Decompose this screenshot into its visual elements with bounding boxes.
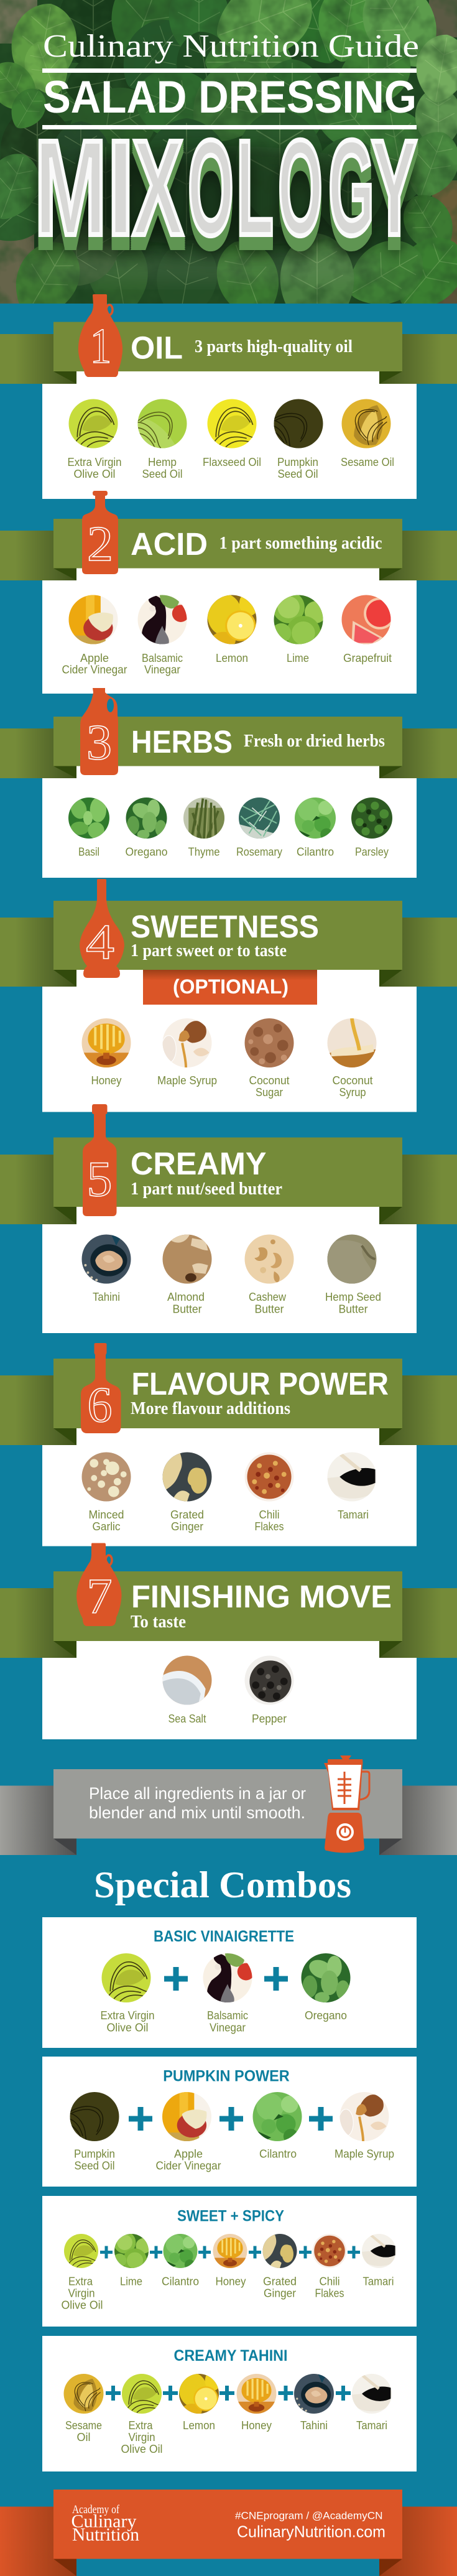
ingredient: sesame oil: Sesame Oil xyxy=(341,455,394,468)
ingredient: minced garlic: Garlic xyxy=(92,1520,121,1533)
combo heading: PUMPKIN POWER xyxy=(163,2068,290,2085)
ingredient: extra virgin olive oil: Olive Oil xyxy=(73,467,116,480)
ingredient: coconut syrup: Coconut xyxy=(332,1074,373,1087)
header rule xyxy=(42,68,417,73)
heading: herbs: HERBS xyxy=(131,724,233,760)
panel: combo pumpkin power xyxy=(42,2057,417,2187)
subheading: More flavour additions xyxy=(131,1399,290,1418)
icon: bottle 7: 7 xyxy=(87,1569,112,1624)
ingredient: pumpkin seed oil xyxy=(265,399,323,480)
ingredient: hemp seed oil: Seed Oil xyxy=(142,467,183,480)
ingredient: pepper xyxy=(245,1656,293,1725)
ingredient: cilantro xyxy=(162,2234,199,2288)
panel: step 5 creamy xyxy=(0,1104,457,1333)
ingredient: flaxseed oil: Flaxseed Oil xyxy=(203,455,261,468)
ingredient: balsamic vinegar: Balsamic xyxy=(142,651,183,664)
ingredient: basil xyxy=(68,796,109,858)
ingredient: tamari: Tamari xyxy=(363,2274,394,2288)
icon: bottle 4 xyxy=(80,879,124,978)
plus sign xyxy=(129,2107,152,2131)
ingredient: lemon: Lemon xyxy=(183,2419,215,2432)
ingredient: honey xyxy=(213,2234,247,2288)
footer ribbon xyxy=(0,2490,457,2576)
ingredient: thyme: Thyme xyxy=(188,845,220,858)
ingredient: maple syrup: Maple Syrup xyxy=(335,2147,394,2160)
icon: bottle 2: 2 xyxy=(87,517,113,572)
heading: sweetness: SWEETNESS xyxy=(131,909,319,944)
plus sign xyxy=(164,1967,188,1991)
header rule xyxy=(42,125,417,129)
plus sign xyxy=(219,2107,243,2131)
panel: combo creamy tahini xyxy=(42,2336,417,2471)
panel: step 6 flavour power xyxy=(0,1343,457,1546)
ingredient: extra virgin olive oil: Virgin xyxy=(128,2430,155,2443)
plus sign xyxy=(309,2107,333,2131)
logo: Academy of Culinary Nutrition: Nutrition xyxy=(72,2524,139,2545)
callout: optional: (OPTIONAL) xyxy=(173,975,289,998)
plus sign xyxy=(249,2246,261,2258)
ingredient: almond butter: Butter xyxy=(173,1303,201,1315)
header photo: salad greens xyxy=(0,0,457,333)
combo heading: CREAMY TAHINI xyxy=(174,2347,287,2364)
ingredient: lime xyxy=(272,592,326,664)
icon: bottle 1 xyxy=(78,294,122,377)
ingredient: coconut syrup xyxy=(327,1018,377,1099)
ingredient: extra virgin olive oil: Extra xyxy=(128,2419,153,2432)
ingredient: extra virgin olive oil: Olive Oil xyxy=(61,2298,103,2312)
icon: bottle 3 xyxy=(80,688,118,775)
footer website: CulinaryNutrition.com xyxy=(237,2522,385,2541)
header title: Mixology 3D lettering: X xyxy=(132,113,183,264)
subheading: 1 part something acidic xyxy=(219,534,382,553)
ingredient: cashew butter: Butter xyxy=(255,1303,284,1315)
ingredient: sea salt xyxy=(163,1656,211,1725)
ingredient: sesame oil: Oil xyxy=(77,2430,91,2443)
ingredient: grated ginger: Ginger xyxy=(264,2287,296,2299)
ingredient: balsamic vinegar xyxy=(138,595,189,676)
ingredient: oregano xyxy=(126,797,168,858)
ingredient: almond butter xyxy=(163,1234,211,1315)
ingredient: balsamic vinegar: Vinegar xyxy=(210,2020,246,2034)
ingredient: sesame oil: Sesame xyxy=(65,2419,102,2432)
instruction text xyxy=(89,1784,306,1822)
ingredient: grated ginger xyxy=(262,2234,297,2299)
subheading: 1 part sweet or to taste xyxy=(131,941,287,960)
ingredient: extra virgin olive oil: Extra Virgin xyxy=(101,2009,154,2022)
ingredient: grated ginger: Ginger xyxy=(171,1520,203,1533)
ingredient: cashew butter: Cashew xyxy=(249,1290,287,1303)
ingredient: balsamic vinegar: Balsamic xyxy=(207,2009,248,2022)
ingredient: tahini: Tahini xyxy=(93,1290,120,1303)
ingredient: pumpkin seed oil: Pumpkin xyxy=(74,2147,115,2160)
combo heading: SWEET + SPICY xyxy=(177,2207,284,2225)
ingredient: coconut syrup: Syrup xyxy=(339,1086,366,1099)
ingredient: oregano: Oregano xyxy=(126,845,168,858)
heading: special combos: Special Combos xyxy=(94,1864,351,1905)
heading: finishing move: FINISHING MOVE xyxy=(131,1579,392,1614)
subheading: 3 parts high-quality oil xyxy=(195,337,353,356)
ingredient: hemp seed butter xyxy=(325,1234,381,1315)
plus sign xyxy=(299,2246,312,2258)
ingredient: grated ginger: Grated xyxy=(263,2274,297,2288)
ingredient: extra virgin olive oil: Olive Oil xyxy=(107,2020,148,2034)
ingredient: almond butter: Almond xyxy=(167,1290,205,1303)
header title: Mixology 3D lettering: G xyxy=(328,113,374,264)
ingredient: lemon xyxy=(208,592,259,664)
ingredient: balsamic vinegar xyxy=(203,1953,254,2034)
footer hashtag and handle: #CNEprogram / @AcademyCN xyxy=(235,2509,383,2522)
ingredient: tamari xyxy=(327,1452,377,1521)
header title: Mixology 3D lettering: L xyxy=(236,113,274,264)
plus sign xyxy=(150,2246,162,2258)
ingredient: maple syrup: Maple Syrup xyxy=(157,1074,217,1087)
ingredient: grated ginger xyxy=(163,1452,211,1533)
ingredient: pepper: Pepper xyxy=(252,1712,287,1725)
heading: acid: ACID xyxy=(131,526,208,562)
icon: bottle 1: 1 xyxy=(90,319,112,374)
panel: step 4 sweetness xyxy=(0,879,457,1112)
ingredient: coconut sugar xyxy=(245,1018,293,1099)
ingredient: honey: Honey xyxy=(91,1074,122,1087)
ingredient: apple cider vinegar: Apple xyxy=(174,2147,203,2160)
ingredient: honey: Honey xyxy=(241,2419,272,2432)
ingredient: coconut sugar: Sugar xyxy=(256,1086,283,1099)
ingredient: parsley xyxy=(351,797,392,858)
ingredient: honey xyxy=(236,2374,276,2432)
heading: flavour power: FLAVOUR POWER xyxy=(132,1366,389,1402)
ingredient: sea salt: Sea Salt xyxy=(168,1712,206,1725)
plus sign xyxy=(106,2386,121,2401)
ingredient: apple cider vinegar: Cider Vinegar xyxy=(155,2159,221,2172)
ingredient: oregano xyxy=(301,1953,351,2022)
ingredient: pumpkin seed oil: Seed Oil xyxy=(75,2159,114,2172)
ingredient: cilantro: Cilantro xyxy=(162,2274,199,2288)
ingredient: cilantro xyxy=(295,797,336,858)
header title: Culinary Nutrition Guide: Culinary Nutrition Guide xyxy=(43,29,419,64)
ingredient: lime xyxy=(113,2231,151,2288)
ingredient: grated ginger: Grated xyxy=(170,1508,204,1521)
instruction text: blender and mix until smooth. xyxy=(89,1803,305,1822)
ingredient: chili flakes xyxy=(245,1452,293,1533)
icon: bottle 3: 3 xyxy=(86,715,112,770)
ingredient: chili flakes xyxy=(312,2234,347,2299)
ingredient: hemp seed butter: Butter xyxy=(338,1303,368,1315)
logo: Academy of Culinary Nutrition: Academy of xyxy=(72,2503,120,2516)
ingredient: tamari: Tamari xyxy=(338,1508,369,1521)
ingredient: chili flakes: Chili xyxy=(259,1508,280,1521)
ingredient: apple cider vinegar xyxy=(155,2092,221,2172)
ingredient: pumpkin seed oil: Pumpkin xyxy=(277,455,318,468)
header title: Mixology 3D lettering: I xyxy=(107,113,134,264)
ingredient: tahini xyxy=(82,1234,131,1303)
instruction text: Place all ingredients in a jar or xyxy=(89,1784,306,1803)
icon: blender xyxy=(324,1755,369,1853)
ingredient: extra virgin olive oil: Extra xyxy=(68,2274,93,2288)
ingredient: hemp seed oil: Hemp xyxy=(148,455,177,468)
ingredient: apple cider vinegar: Apple xyxy=(80,651,109,664)
ingredient: extra virgin olive oil xyxy=(121,2374,163,2455)
subheading: Fresh or dried herbs xyxy=(244,732,385,751)
ingredient: lemon: Lemon xyxy=(216,651,248,664)
header title: Salad Dressing: SALAD DRESSING xyxy=(43,72,417,123)
ingredient: balsamic vinegar: Vinegar xyxy=(144,663,180,676)
ingredient: honey xyxy=(82,1018,131,1087)
panel: combo basic vinaigrette xyxy=(42,1917,417,2048)
panel: step 3 herbs xyxy=(0,688,457,878)
plus sign xyxy=(336,2386,351,2401)
ingredient: grapefruit xyxy=(342,595,395,664)
plus sign xyxy=(163,2386,178,2401)
ingredient: sesame oil xyxy=(63,2374,105,2443)
ingredient: extra virgin olive oil xyxy=(101,1953,154,2034)
ingredient: maple syrup xyxy=(157,1018,217,1087)
ingredient: lime: Lime xyxy=(120,2274,142,2288)
icon: bottle 7 xyxy=(76,1543,122,1626)
ingredient: coconut sugar: Coconut xyxy=(249,1074,290,1087)
plus sign xyxy=(348,2246,360,2258)
heading: oil: OIL xyxy=(131,330,183,366)
callout: optional xyxy=(143,970,317,1005)
ingredient: extra virgin olive oil xyxy=(61,2234,103,2312)
ingredient: basil: Basil xyxy=(78,845,99,858)
ingredient: chili flakes: Chili xyxy=(320,2274,339,2288)
icon: bottle 5: 5 xyxy=(87,1152,112,1207)
icon: bottle 2 xyxy=(82,491,118,574)
ingredient: tahini: Tahini xyxy=(300,2419,328,2432)
ingredient: sesame oil xyxy=(341,399,394,468)
ingredient: extra virgin olive oil: Olive Oil xyxy=(121,2442,163,2455)
subheading: 1 part nut/seed butter xyxy=(131,1179,282,1199)
ingredient: apple cider vinegar: Cider Vinegar xyxy=(62,663,127,676)
ingredient: pumpkin seed oil xyxy=(61,2092,119,2172)
ingredient: tamari xyxy=(362,2234,396,2288)
ingredient: lemon xyxy=(179,2371,221,2432)
plus sign xyxy=(279,2386,293,2401)
ingredient: maple syrup xyxy=(335,2092,394,2160)
ingredient: minced garlic xyxy=(82,1452,131,1533)
panel: step 7 finishing move xyxy=(0,1543,457,1739)
ingredient: thyme xyxy=(183,797,224,858)
ingredient: rosemary: Rosemary xyxy=(236,845,283,858)
ingredient: lime: Lime xyxy=(287,651,309,664)
icon: bottle 4: 4 xyxy=(86,915,114,970)
ingredient: tahini xyxy=(294,2374,334,2432)
ingredient: pumpkin seed oil: Seed Oil xyxy=(277,467,318,480)
subheading: To taste xyxy=(131,1612,186,1632)
ingredient: parsley: Parsley xyxy=(355,845,389,858)
panel: step 1 oil xyxy=(0,294,457,499)
ingredient: minced garlic: Minced xyxy=(88,1508,124,1521)
panel: combo sweet and spicy xyxy=(42,2196,417,2327)
plus sign xyxy=(198,2246,211,2258)
ingredient: apple cider vinegar xyxy=(62,595,127,676)
combo heading: BASIC VINAIGRETTE xyxy=(154,1928,294,1945)
ingredient: hemp seed butter: Hemp Seed xyxy=(325,1290,381,1303)
plus sign xyxy=(264,1967,288,1991)
header title: Mixology 3D lettering: M xyxy=(34,113,107,264)
ingredient: flaxseed oil xyxy=(203,399,261,468)
ingredient: honey: Honey xyxy=(215,2274,246,2288)
header title: Mixology 3D lettering xyxy=(34,113,417,264)
plus sign xyxy=(100,2246,113,2258)
ingredient: tamari: Tamari xyxy=(356,2419,387,2432)
panel: mix instruction ribbon xyxy=(0,1755,457,1855)
logo: Academy of Culinary Nutrition xyxy=(71,2503,139,2545)
ingredient: rosemary xyxy=(236,797,283,858)
ingredient: extra virgin olive oil: Extra Virgin xyxy=(67,455,122,468)
ingredient: hemp seed oil xyxy=(130,399,187,480)
ingredient: chili flakes: Flakes xyxy=(255,1520,284,1533)
ingredient: oregano: Oregano xyxy=(305,2009,347,2022)
ingredient: cilantro: Cilantro xyxy=(297,845,334,858)
ingredient: cilantro: Cilantro xyxy=(259,2147,297,2160)
header title: Mixology 3D lettering: O xyxy=(278,113,323,264)
ingredient: cashew butter xyxy=(245,1234,293,1315)
icon: bottle 5 xyxy=(83,1104,117,1216)
heading: creamy: CREAMY xyxy=(131,1146,266,1181)
ingredient: grapefruit: Grapefruit xyxy=(343,651,392,664)
icon: bottle 6: 6 xyxy=(87,1378,112,1433)
ingredient: chili flakes: Flakes xyxy=(315,2287,344,2299)
ingredient: extra virgin olive oil: Virgin xyxy=(68,2287,95,2299)
header title: Mixology 3D lettering: O xyxy=(188,113,234,264)
ingredient: tamari xyxy=(352,2374,392,2432)
ingredient: extra virgin olive oil xyxy=(67,399,122,480)
ingredient: cilantro xyxy=(252,2092,302,2160)
icon: bottle 6 xyxy=(81,1343,121,1433)
panel: step 2 acid xyxy=(0,491,457,694)
plus sign xyxy=(219,2386,234,2401)
logo: Academy of Culinary Nutrition: Culinary xyxy=(71,2511,137,2532)
